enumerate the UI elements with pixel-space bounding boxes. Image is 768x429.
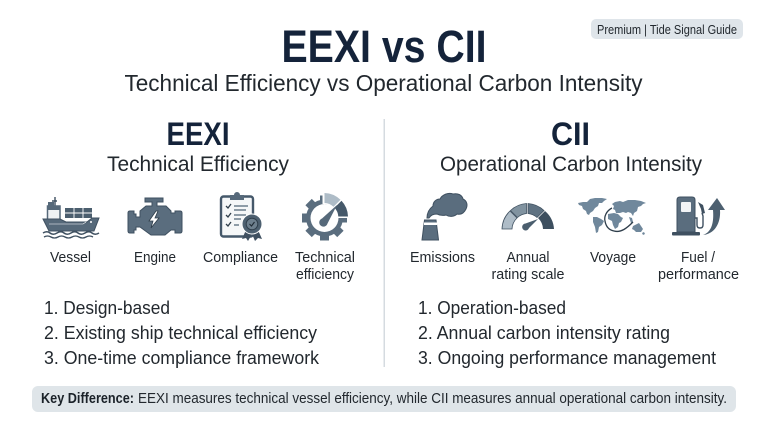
panel: EEXI (43, 116, 355, 368)
subheading: operational carbon intensity: Operational Carbon Intensity (440, 152, 702, 176)
icon: technical efficiency gear (302, 193, 348, 240)
label: annual rating scale: rating scale (492, 267, 564, 283)
icon: vessel (43, 197, 99, 238)
label: annual rating scale (492, 250, 564, 283)
panel: CII (410, 116, 739, 368)
list: EEXI points: 2. Existing ship technical efficiency (44, 323, 317, 343)
subheading: technical efficiency: Technical Efficiency (107, 152, 289, 176)
icon: annual rating scale gauge (502, 204, 554, 230)
icon: compliance (221, 192, 262, 241)
list: EEXI points: 1. Design-based (44, 298, 170, 318)
list: CII points (418, 298, 716, 368)
callout: key difference: Key Difference: (41, 391, 134, 407)
icon: fuel and performance (672, 197, 725, 236)
label: fuel / performance: Fuel / (681, 250, 716, 266)
label: compliance: Compliance (203, 250, 278, 266)
label: engine: Engine (134, 250, 176, 266)
callout: key difference: EEXI measures technical vessel efficiency, while CII measures annual operational carbon intensity. (138, 391, 727, 407)
divider (384, 119, 385, 367)
title: EEXI vs CII (282, 21, 486, 72)
list: EEXI points: 3. One-time compliance framework (44, 348, 320, 368)
list: CII points: 1. Operation-based (418, 298, 566, 318)
label: voyage: Voyage (590, 250, 636, 266)
list: CII points: 3. Ongoing performance management (418, 348, 716, 368)
label: fuel / performance: performance (658, 267, 739, 283)
label: technical efficiency: efficiency (296, 267, 355, 283)
badge: premium guide: Premium | Tide Signal Guide (597, 23, 737, 37)
heading: EEXI: EEXI (166, 116, 230, 152)
label: technical efficiency (295, 250, 355, 283)
label: emissions: Emissions (410, 250, 475, 266)
list: EEXI points (44, 298, 320, 368)
subtitle: Technical Efficiency vs Operational Carbon Intensity (124, 70, 643, 96)
list: CII points: 2. Annual carbon intensity rating (418, 323, 670, 343)
icon: voyage world map (578, 198, 646, 235)
label: vessel: Vessel (50, 250, 91, 266)
label: fuel / performance (658, 250, 739, 283)
heading: CII: CII (551, 116, 590, 152)
callout: key difference (32, 386, 736, 412)
icon: emissions (422, 193, 467, 240)
label: technical efficiency: Technical (295, 250, 355, 266)
label: annual rating scale: Annual (506, 250, 550, 266)
badge: premium guide (591, 19, 743, 39)
icon: engine (128, 198, 182, 235)
